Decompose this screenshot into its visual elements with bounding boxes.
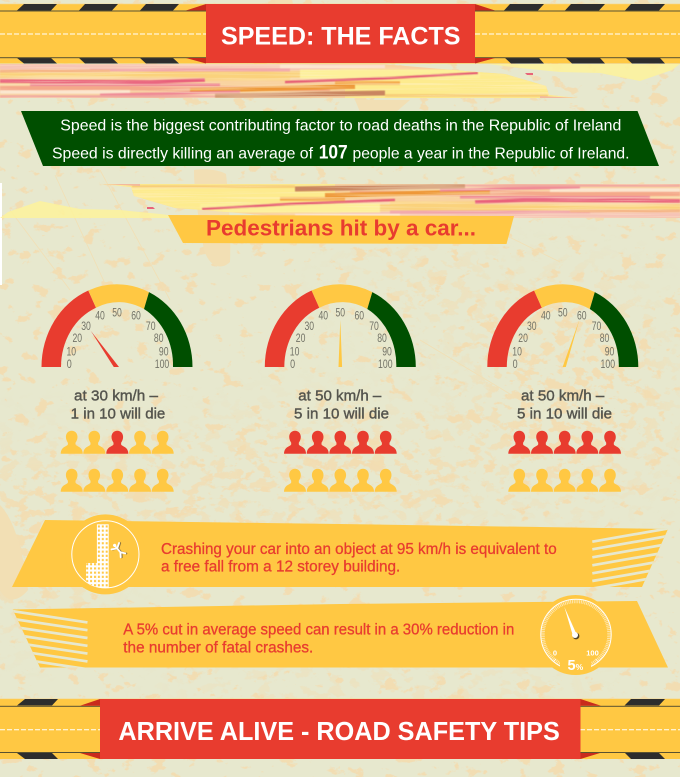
caption second 50: 5 in 10 will die	[517, 405, 612, 422]
icon: 5% speedometer	[536, 595, 616, 675]
top banner	[0, 4, 680, 64]
icon: building and falling figure	[71, 514, 140, 594]
band stripes left	[13, 610, 88, 668]
caption second 50	[517, 388, 612, 422]
panel: gauge at 50 km/h (first)	[265, 284, 416, 492]
5% cut text	[123, 621, 514, 656]
caption 50: at 50 km/h –	[298, 388, 382, 405]
panel: green key facts: people a year in the Republic of Ireland.	[352, 145, 630, 162]
brush stroke: lower	[0, 184, 680, 218]
panel: green key facts: Speed is directly killing an average of	[52, 145, 314, 162]
people 5 in 10	[284, 431, 397, 492]
caption second 50: at 50 km/h –	[521, 388, 605, 405]
gauge dial 30	[41, 284, 192, 371]
bottom banner: red title plate: ARRIVE ALIVE - ROAD SAFETY TIPS	[118, 718, 560, 746]
caption 30: 1 in 10 will die	[71, 405, 165, 422]
free fall text	[161, 541, 557, 576]
5% cut text: A 5% cut in average speed can result in a 30% reduction in	[123, 621, 514, 638]
icon: 5% speedometer: 5%	[568, 658, 584, 674]
people second 5 in 10	[508, 431, 621, 492]
panel: gauge at 30 km/h	[41, 284, 192, 492]
panel: green key facts: Speed is the biggest contributing factor to road deaths in the Republic of Ireland	[60, 118, 621, 134]
people 1 in 10	[61, 431, 174, 492]
caption 50: 5 in 10 will die	[294, 405, 389, 422]
icon: 5% speedometer: 0	[553, 648, 557, 658]
top banner: red title plate	[206, 4, 475, 63]
bottom banner	[0, 698, 680, 759]
gauge dial second 50	[487, 284, 638, 371]
panel: green key facts	[21, 111, 659, 166]
panel: gauge at 50 km/h (second)	[487, 284, 638, 492]
panel: green key facts: 107	[319, 142, 348, 163]
panel: 5% cut fact	[5, 595, 668, 675]
gauge dial 50	[265, 284, 416, 371]
top banner: red title plate: SPEED: THE FACTS	[221, 22, 460, 50]
caption 30: at 30 km/h –	[74, 388, 159, 405]
free fall text: a free fall from a 12 storey building.	[161, 559, 400, 576]
icon: 5% speedometer: 100	[586, 648, 599, 658]
band stripes right	[592, 528, 668, 589]
heading: pedestrians	[168, 215, 514, 244]
5% cut text: the number of fatal crashes.	[123, 639, 313, 656]
free fall text: Crashing your car into an object at 95 km/h is equivalent to	[161, 541, 557, 558]
caption 50	[294, 388, 389, 422]
bottom banner: red title plate	[100, 699, 580, 759]
brush stroke: top	[0, 64, 680, 98]
heading: pedestrians: Pedestrians hit by a car...	[206, 215, 476, 240]
caption 30	[71, 388, 165, 422]
panel: free fall fact	[12, 514, 668, 594]
